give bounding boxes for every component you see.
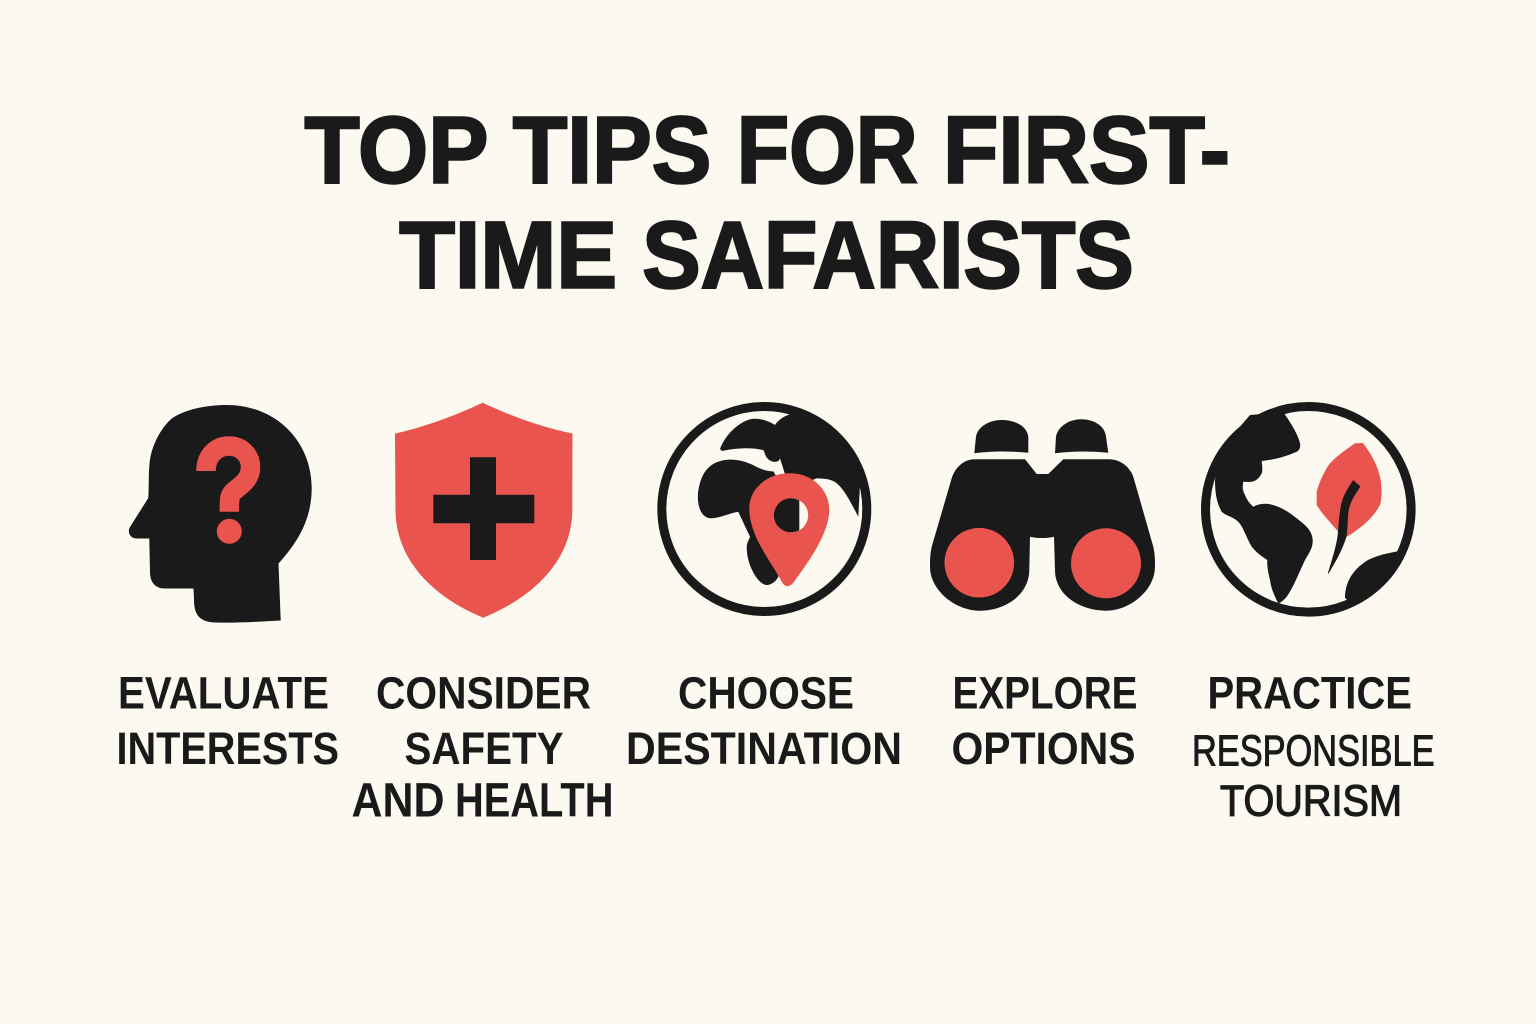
label: choose destination: CHOOSE bbox=[678, 668, 854, 719]
label: practice responsible tourism: TOURISM bbox=[1220, 777, 1402, 825]
label: practice responsible tourism: RESPONSIBLE bbox=[1192, 727, 1434, 775]
label: choose destination: DESTINATION bbox=[626, 723, 902, 774]
title: TOP bbox=[304, 98, 488, 204]
icon: head with question mark bbox=[129, 405, 312, 623]
title: TIME bbox=[399, 202, 617, 308]
label: evaluate interests: EVALUATE bbox=[118, 668, 329, 719]
title: TIPS bbox=[513, 98, 711, 204]
title: FOR bbox=[737, 98, 918, 204]
label: consider safety and health: HEALTH bbox=[455, 775, 614, 828]
panel: practice responsible tourism bbox=[1192, 406, 1434, 825]
label: consider safety and health: SAFETY bbox=[404, 723, 564, 774]
label: consider safety and health bbox=[352, 668, 614, 828]
panel: consider safety and health bbox=[352, 403, 614, 828]
label: practice responsible tourism bbox=[1192, 668, 1434, 825]
icon: globe with leaf bbox=[1206, 406, 1411, 612]
label: practice responsible tourism: PRACTICE bbox=[1208, 668, 1412, 719]
title: FIRST- bbox=[943, 98, 1230, 204]
title: SAFARISTS bbox=[642, 202, 1134, 308]
panel: explore options bbox=[930, 419, 1155, 774]
label: consider safety and health: CONSIDER bbox=[376, 668, 591, 719]
label: evaluate interests: INTERESTS bbox=[116, 723, 339, 774]
label: explore options: EXPLORE bbox=[952, 668, 1138, 719]
label: consider safety and health: AND bbox=[352, 775, 444, 828]
panel: choose destination bbox=[626, 406, 902, 774]
icon: shield with cross bbox=[395, 403, 572, 618]
panel: evaluate interests bbox=[116, 405, 339, 774]
label: explore options: OPTIONS bbox=[952, 723, 1136, 774]
title bbox=[304, 98, 1230, 308]
label: choose destination bbox=[626, 668, 902, 774]
label: evaluate interests bbox=[116, 668, 339, 774]
label: explore options bbox=[952, 668, 1138, 774]
icon: globe with location pin bbox=[662, 406, 867, 612]
icon: binoculars bbox=[930, 419, 1155, 611]
